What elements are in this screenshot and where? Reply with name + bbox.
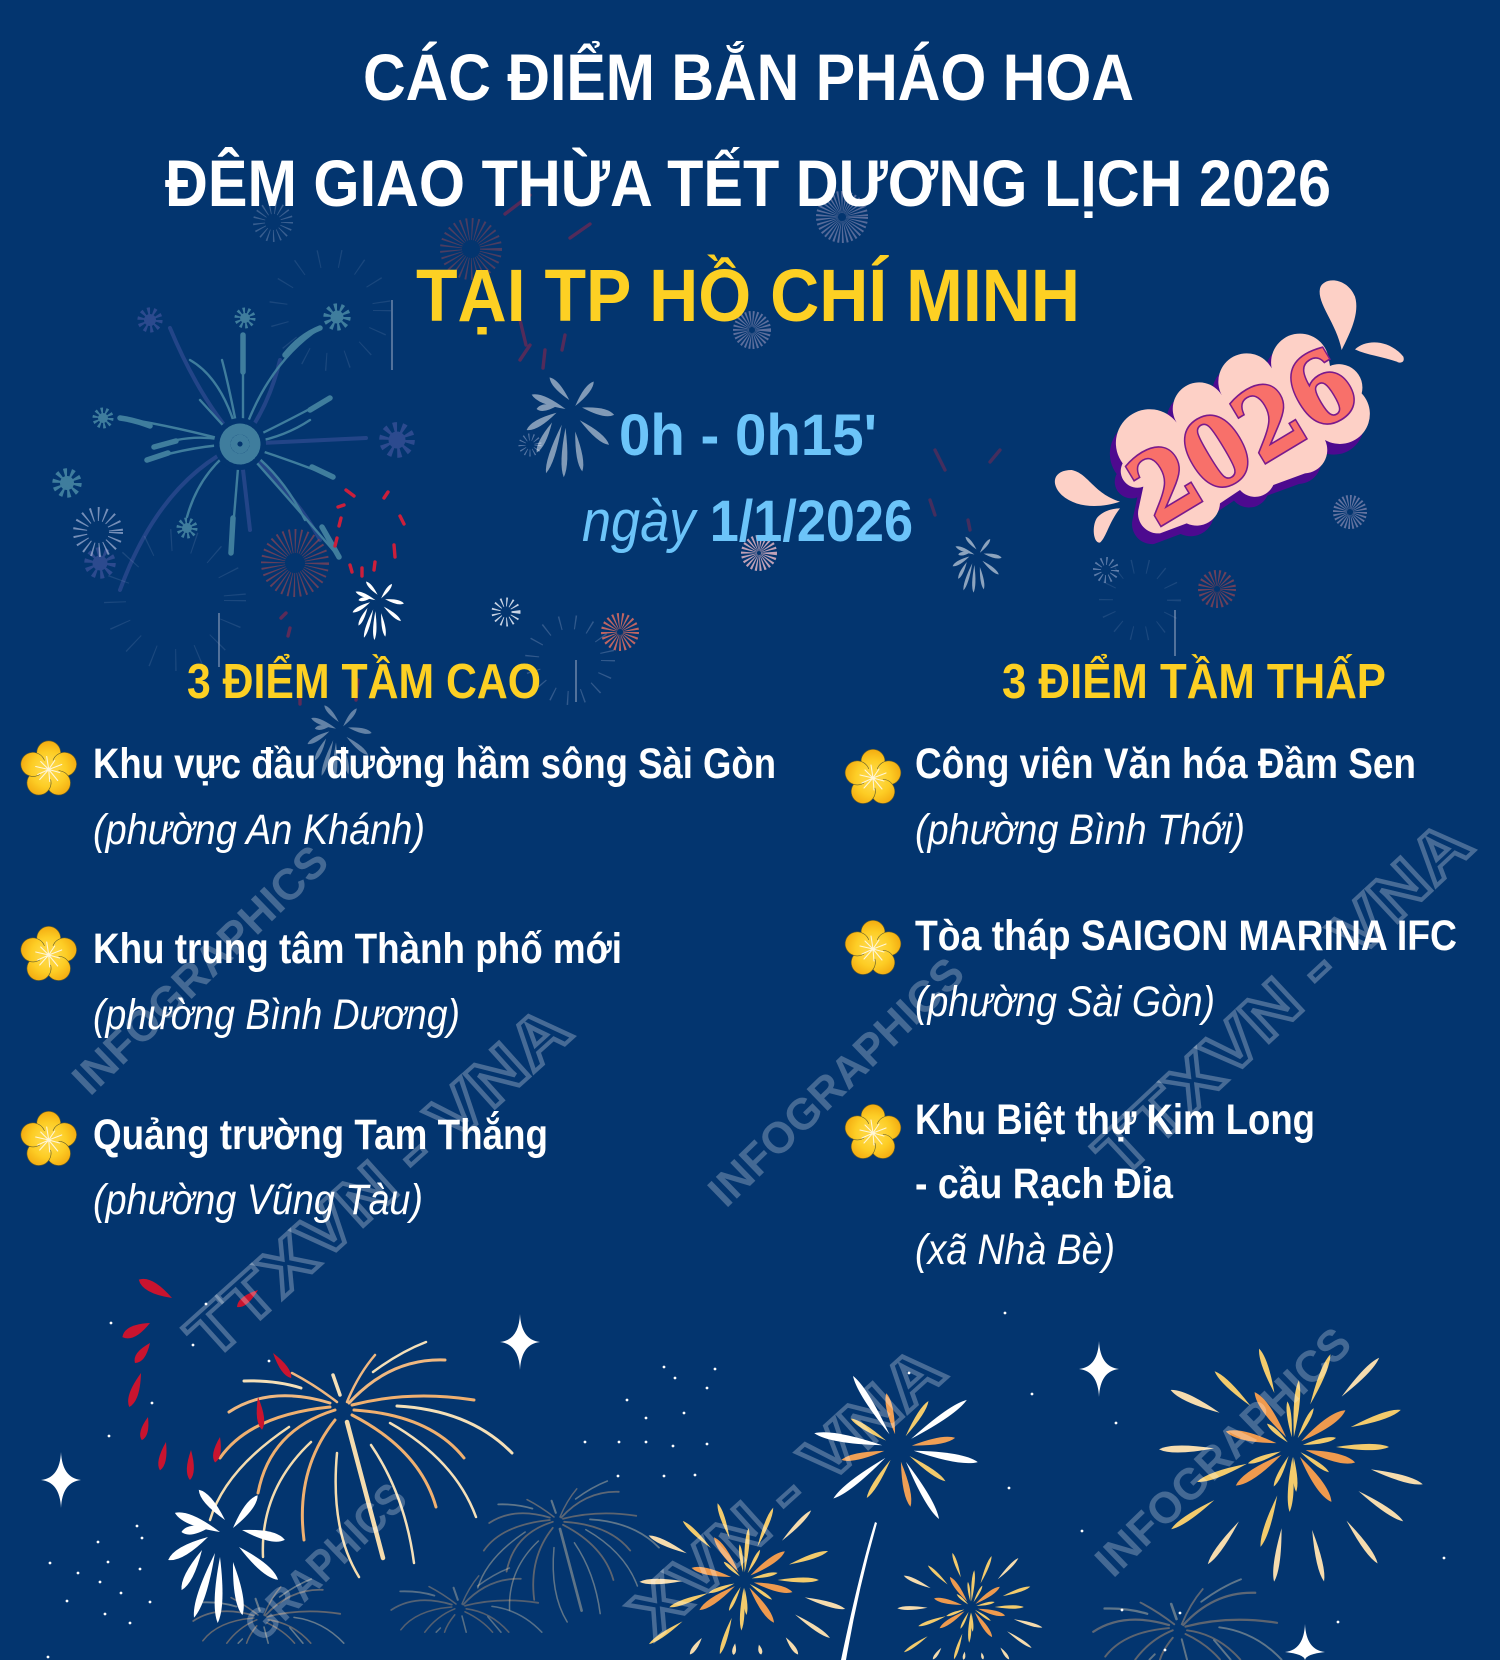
sky stars xyxy=(41,1314,1325,1660)
location: Kim Long villas: Khu Biệt thự Kim Long xyxy=(915,1096,1315,1144)
rocket trail xyxy=(841,1522,877,1660)
firework: orange burst bottom small xyxy=(897,1552,1043,1660)
watermark: INFOGRAPHICS xyxy=(1086,1318,1361,1586)
location: Kim Long villas xyxy=(842,1096,1315,1274)
firework: orange burst right xyxy=(1159,1348,1424,1582)
location: Sai Gon river tunnel xyxy=(18,740,776,854)
watermark: INFOGRAPHICS xyxy=(699,948,974,1216)
small stars and sparkles upper area xyxy=(57,202,1360,702)
firework: red streaks xyxy=(120,1275,294,1480)
location: Dam Sen park: Công viên Văn hóa Đầm Sen xyxy=(915,740,1416,788)
watermark: TTXVN - VNA xyxy=(1080,805,1485,1190)
watermark: GRAPHICS xyxy=(235,1474,416,1651)
firework: orange burst bottom centre xyxy=(639,1503,846,1656)
location: new city centre: Khu trung tâm Thành phố mới xyxy=(93,925,622,973)
location: Sai Gon river tunnel: (phường An Khánh) xyxy=(93,806,425,854)
location: Kim Long villas: (xã Nhà Bè) xyxy=(915,1226,1115,1274)
heading: high-altitude: 3 ĐIỂM TẦM CAO xyxy=(187,654,541,709)
icon: 2026 balloon badge: 2026 xyxy=(1109,325,1377,548)
location: Sai Gon river tunnel: Khu vực đầu đường hầm sông Sài Gòn xyxy=(93,740,776,788)
firework: grey-blue and white small bursts upper xyxy=(306,375,1002,779)
watermark: XVN - VNA xyxy=(615,1331,958,1650)
location: new city centre: (phường Bình Dương) xyxy=(93,991,460,1039)
subtitle: location: TẠI TP HỒ CHÍ MINH xyxy=(416,254,1080,337)
firework: white and orange burst centre xyxy=(814,1374,978,1521)
watermark xyxy=(63,805,1485,1651)
location: Kim Long villas: - cầu Rạch Đỉa xyxy=(915,1160,1174,1208)
location: Saigon Marina IFC xyxy=(842,912,1457,1026)
location: Saigon Marina IFC: (phường Sài Gòn) xyxy=(915,978,1215,1026)
firework: red sparks upper xyxy=(281,195,1000,704)
firework: dim arc bursts bottom xyxy=(193,1481,1282,1660)
location: Tam Thang square: (phường Vũng Tàu) xyxy=(93,1176,423,1224)
location: Dam Sen park: (phường Bình Thới) xyxy=(915,806,1245,854)
location: Dam Sen park xyxy=(842,740,1416,854)
firework: large orange arc burst xyxy=(210,1342,512,1577)
time: 0h - 0h15' xyxy=(619,403,877,468)
title: CÁC ĐIỂM BẮN PHÁO HOA xyxy=(363,40,1134,114)
heading: low-altitude: 3 ĐIỂM TẦM THẤP xyxy=(1002,654,1386,709)
title: ĐÊM GIAO THỪA TẾT DƯƠNG LỊCH 2026 xyxy=(165,146,1331,220)
firework: white burst lower left xyxy=(166,1487,286,1623)
watermark: INFOGRAPHICS xyxy=(63,836,338,1104)
firework: teal burst upper left xyxy=(120,328,366,590)
location: Tam Thang square: Quảng trường Tam Thắng xyxy=(93,1110,548,1159)
sky dots xyxy=(48,1304,1444,1657)
panel: high-altitude sites xyxy=(18,654,776,1224)
location: new city centre xyxy=(18,925,622,1039)
location: Tam Thang square xyxy=(18,1110,548,1224)
watermark: TTXVN - VNA xyxy=(172,991,584,1372)
title xyxy=(165,40,1331,220)
date: ngày 1/1/2026 xyxy=(582,489,913,554)
panel: low-altitude sites xyxy=(842,654,1457,1274)
